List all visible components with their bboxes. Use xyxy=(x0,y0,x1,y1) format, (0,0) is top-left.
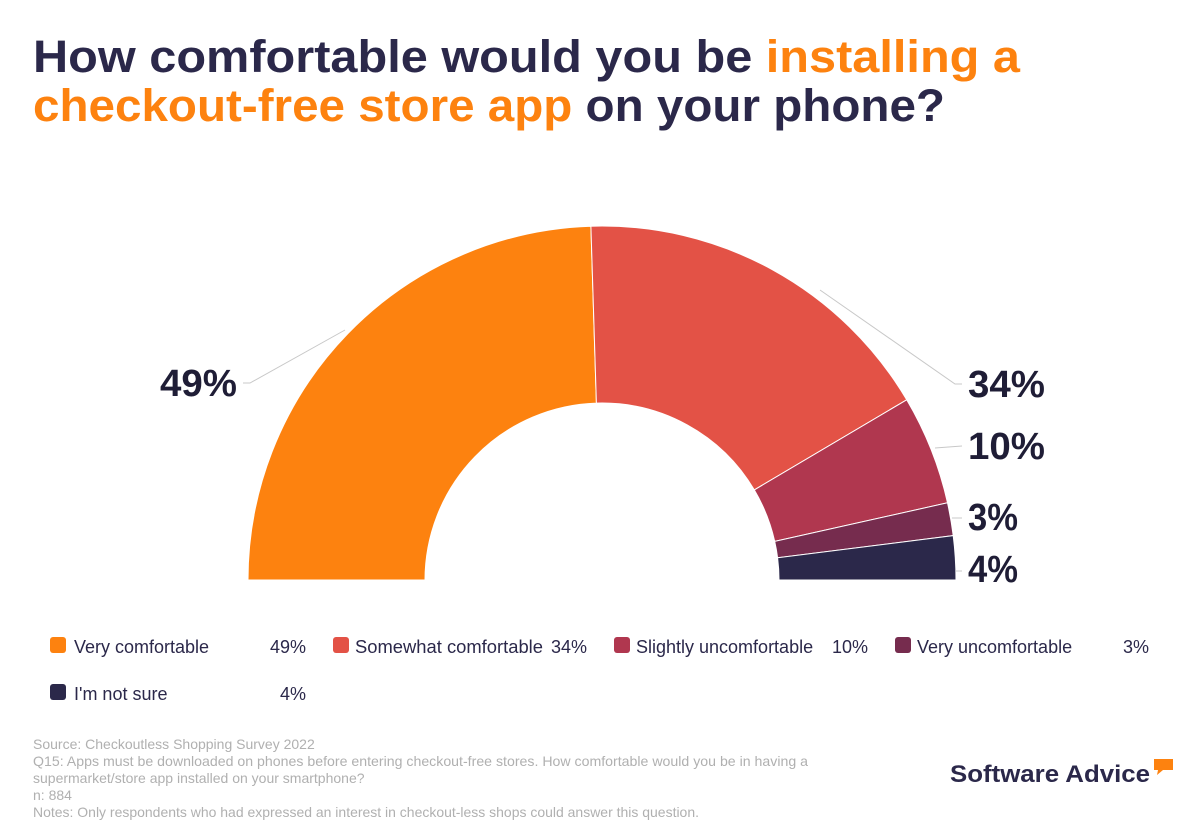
footer source notes: n: 884 xyxy=(33,787,72,803)
title: checkout-free store app on your phone? xyxy=(33,80,945,131)
legend item: not sure: I'm not sure xyxy=(74,684,167,704)
legend item: slightly uncomfortable xyxy=(614,637,868,657)
footer source notes: Q15: Apps must be downloaded on phones before entering checkout-free stores. How comfortable would you be in having a xyxy=(33,753,808,769)
segment: somewhat comfortable xyxy=(591,226,907,490)
legend item: slightly uncomfortable: Slightly uncomfortable xyxy=(636,637,813,657)
legend item: not sure: 4% xyxy=(280,684,306,704)
data labels: 10% xyxy=(968,426,1045,468)
segment: very comfortable xyxy=(248,226,596,580)
title: How comfortable would you be installing a xyxy=(33,31,1021,82)
legend item: very uncomfortable: Very uncomfortable xyxy=(917,637,1072,657)
legend item: somewhat comfortable: Somewhat comfortable xyxy=(355,637,543,657)
segment: slightly uncomfortable xyxy=(754,400,948,541)
legend item: very comfortable xyxy=(50,637,306,657)
legend item: somewhat comfortable: 34% xyxy=(551,637,587,657)
icon: speech bubble xyxy=(1154,759,1173,775)
data labels xyxy=(160,363,1045,591)
data labels: 3% xyxy=(968,497,1018,539)
footer source notes: Source: Checkoutless Shopping Survey 2022 xyxy=(33,736,315,752)
leader lines xyxy=(243,290,962,571)
data labels: 49% xyxy=(160,363,237,405)
legend item: slightly uncomfortable: 10% xyxy=(832,637,868,657)
footer source notes xyxy=(33,736,808,820)
data labels: 4% xyxy=(968,549,1018,591)
logo: Software Advice: Software Advice xyxy=(950,761,1150,788)
legend xyxy=(50,637,1149,704)
data labels: 34% xyxy=(968,364,1045,406)
title xyxy=(33,31,1021,131)
segment: not sure xyxy=(778,536,956,580)
footer source notes: Notes: Only respondents who had expressed an interest in checkout-less shops could answer this question. xyxy=(33,804,699,820)
legend item: very comfortable: Very comfortable xyxy=(74,637,209,657)
legend item: very uncomfortable: 3% xyxy=(1123,637,1149,657)
segment: very uncomfortable xyxy=(775,503,953,558)
legend item: very uncomfortable xyxy=(895,637,1149,657)
legend item: very comfortable: 49% xyxy=(270,637,306,657)
footer source notes: supermarket/store app installed on your smartphone? xyxy=(33,770,365,786)
legend item: not sure xyxy=(50,684,306,704)
half donut chart xyxy=(248,226,956,580)
